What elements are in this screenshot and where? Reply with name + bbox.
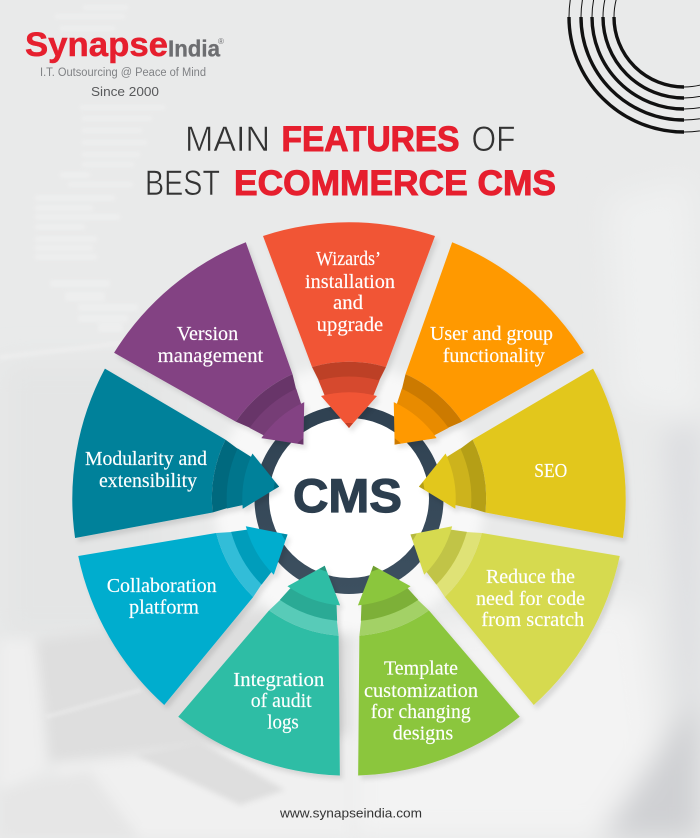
segment: seo: [404, 366, 636, 571]
logo wordmark: Synapse: [25, 26, 168, 64]
segment: collaboration: [66, 460, 331, 712]
label: collaboration: Collaboration: [107, 575, 217, 597]
label: user and group: User and group: [430, 323, 553, 345]
since: Since 2000: [91, 84, 159, 99]
label: modularity: Modularity and: [85, 448, 207, 470]
title word: best: BEST: [145, 164, 220, 203]
hub ring: [254, 405, 444, 594]
background: laptop keyboard: [135, 742, 285, 805]
segment: audit logs: [174, 536, 406, 788]
label: modularity: extensibility: [99, 470, 198, 492]
website url: www.synapseindia.com: [279, 806, 422, 820]
label: audit logs: Integration: [233, 669, 324, 691]
label: wizards: upgrade: [317, 314, 383, 336]
title words: ecommerce cms: ECOMMERCE CMS: [234, 164, 556, 203]
label: seo: SEO: [534, 460, 567, 482]
registered mark: ®: [218, 37, 224, 46]
label: wizards: installation: [305, 271, 395, 293]
segment: template customization: [292, 536, 524, 788]
logo suffix: India: [168, 36, 221, 62]
segment: user and group: [329, 232, 593, 500]
label: template: for changing: [371, 701, 471, 723]
title word: features: FEATURES: [282, 120, 460, 159]
label: user and group: functionality: [443, 345, 545, 367]
segment: version management: [105, 232, 369, 500]
label: reduce code: Reduce the: [486, 566, 575, 588]
label: reduce code: need for code: [476, 588, 585, 610]
segment: wizards: [263, 222, 435, 428]
hub label: CMS: [293, 469, 402, 522]
segment: reduce code: [367, 460, 632, 712]
label: template: Template: [384, 658, 458, 680]
title: [145, 120, 556, 203]
title word: of: OF: [472, 120, 516, 159]
logo: [25, 26, 224, 99]
decoration: concentric arcs top right: [569, 0, 700, 132]
label: audit logs: logs: [267, 712, 299, 734]
label: wizards: and: [333, 292, 363, 314]
label: template: customization: [364, 680, 478, 702]
tagline: I.T. Outsourcing @ Peace of Mind: [40, 67, 206, 79]
label: template: designs: [393, 722, 453, 744]
hub circle: [269, 418, 429, 578]
label: version: Version: [177, 323, 238, 345]
segment: modularity: [62, 366, 294, 571]
light halo behind hub: [214, 364, 484, 634]
label: reduce code: from scratch: [481, 609, 584, 631]
label: version: management: [158, 345, 264, 367]
title word: main: MAIN: [185, 120, 270, 159]
label: wizards: Wizards’: [316, 248, 381, 270]
label: audit logs: of audit: [251, 690, 312, 712]
label: collaboration: platform: [129, 596, 199, 618]
